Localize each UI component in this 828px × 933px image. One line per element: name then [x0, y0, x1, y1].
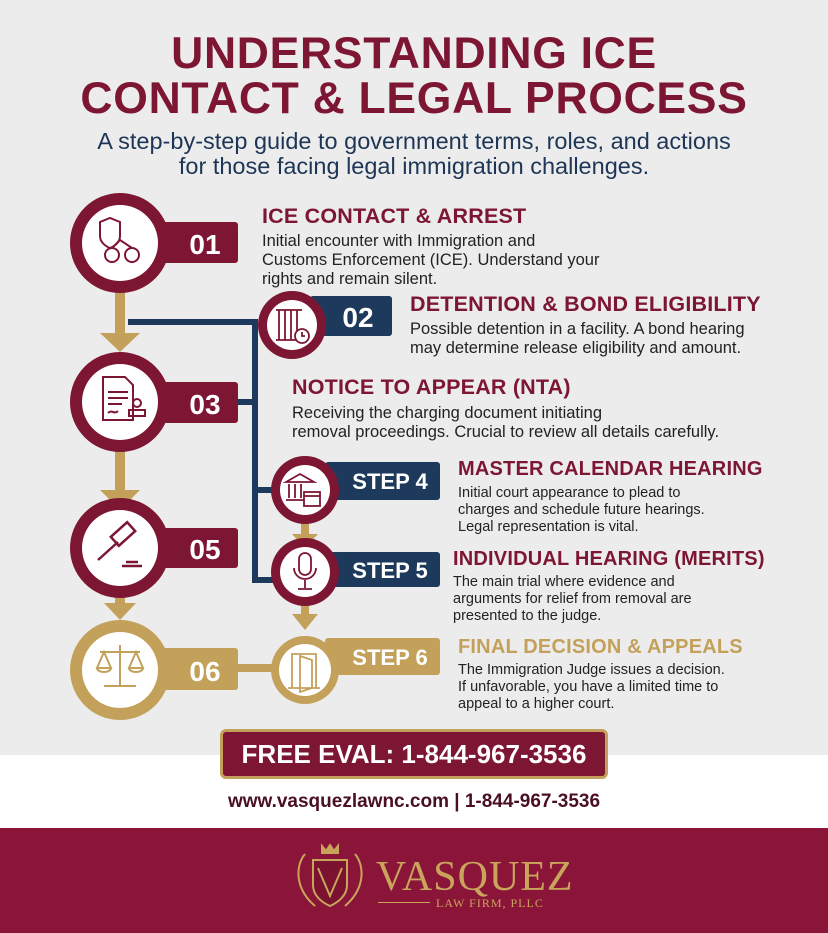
step 05 — [70, 498, 238, 598]
step 4: STEP 4 — [352, 469, 428, 494]
text: 01: Customs Enforcement (ICE). Understand your — [262, 251, 599, 269]
text: 02: Possible detention in a facility. A bond hearing — [410, 320, 745, 338]
step 06: 06 — [189, 656, 221, 687]
subtitle: A step-by-step guide to government terms, roles, and actions — [97, 128, 731, 154]
footer: LAW FIRM, PLLC — [436, 896, 544, 910]
text: 06: The Immigration Judge issues a decision. — [458, 662, 725, 678]
text: 02: DETENTION & BOND ELIGIBILITY — [410, 292, 761, 316]
step 01 — [70, 193, 238, 293]
text: 04: charges and schedule future hearings. — [458, 502, 705, 518]
text: 05: INDIVIDUAL HEARING (MERITS) — [453, 548, 765, 570]
step 4 — [271, 456, 440, 524]
text: 03: removal proceedings. Crucial to review all details carefully. — [292, 423, 719, 441]
subtitle — [97, 128, 731, 179]
text: 03: NOTICE TO APPEAR (NTA) — [292, 375, 571, 399]
step 03: 03 — [189, 389, 221, 420]
text: 03 — [292, 375, 719, 441]
text: 04: MASTER CALENDAR HEARING — [458, 458, 763, 480]
step 02 — [258, 291, 392, 359]
logo text: VASQUEZ — [376, 854, 574, 900]
text: 04: Legal representation is vital. — [458, 519, 639, 535]
title: CONTACT & LEGAL PROCESS — [80, 74, 748, 123]
CTA button: FREE EVAL: 1-844-967-3536 — [242, 739, 586, 769]
white band — [0, 755, 828, 828]
step 05: 05 — [189, 534, 221, 565]
logo emblem — [297, 843, 363, 907]
text: 01: ICE CONTACT & ARREST — [262, 204, 526, 228]
text: 05: presented to the judge. — [453, 608, 601, 624]
text: 04 — [458, 458, 763, 535]
text: 06: FINAL DECISION & APPEALS — [458, 636, 743, 658]
text: 01 — [262, 204, 600, 288]
text: 01: Initial encounter with Immigration and — [262, 232, 535, 250]
footer — [0, 828, 828, 933]
text: 01: rights and remain silent. — [262, 270, 437, 288]
text: 05: arguments for relief from removal are — [453, 591, 692, 607]
step 6 — [271, 636, 440, 704]
step 5 — [271, 538, 440, 606]
contact line: www.vasquezlawnc.com | 1-844-967-3536 — [228, 791, 600, 812]
text: 03: Receiving the charging document initiating — [292, 404, 602, 422]
step 01: 01 — [189, 229, 221, 260]
CTA button — [220, 729, 608, 779]
text: 06: appeal to a higher court. — [458, 696, 614, 712]
text: 05: The main trial where evidence and — [453, 574, 675, 590]
text: 04: Initial court appearance to plead to — [458, 485, 680, 501]
step 02: 02 — [342, 302, 374, 333]
step 06 — [70, 620, 238, 720]
step 5: STEP 5 — [352, 558, 428, 583]
subtitle: for those facing legal immigration challenges. — [179, 153, 649, 179]
text: 06: If unfavorable, you have a limited time to — [458, 679, 718, 695]
text: 02: may determine release eligibility and amount. — [410, 339, 741, 357]
step 03 — [70, 352, 238, 452]
title — [80, 29, 748, 123]
text: 06 — [458, 636, 743, 712]
step 6: STEP 6 — [352, 645, 428, 670]
title: UNDERSTANDING ICE — [171, 29, 657, 78]
text: 02 — [410, 292, 761, 357]
text: 05 — [453, 548, 765, 624]
